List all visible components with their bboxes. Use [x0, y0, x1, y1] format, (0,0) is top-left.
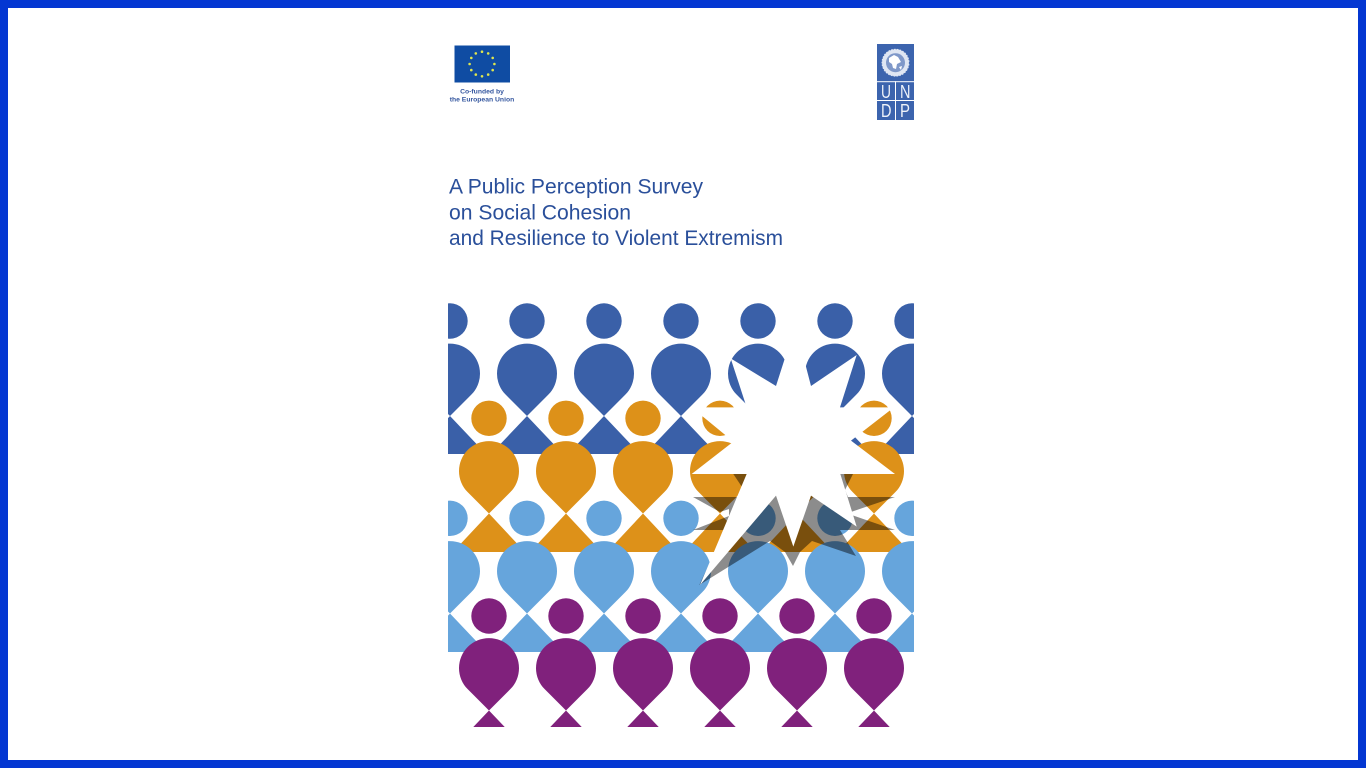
- EU caption: the European Union: [450, 96, 514, 103]
- UNDP letters: D: [881, 100, 892, 121]
- title: A Public Perception Survey: [449, 175, 703, 198]
- illustration: rows of people with starburst: [448, 303, 914, 727]
- title: and Resilience to Violent Extremism: [449, 227, 783, 250]
- people row: dark blue: [448, 303, 914, 454]
- logo: EU co-funded: [450, 46, 514, 103]
- title: on Social Cohesion: [449, 201, 631, 224]
- people row: purple: [459, 598, 904, 727]
- UNDP letters: P: [900, 100, 910, 121]
- white starburst: [692, 355, 895, 585]
- logo: UNDP: [877, 44, 914, 121]
- EU caption: Co-funded by: [460, 88, 504, 95]
- people row: light blue: [448, 500, 914, 652]
- title: [449, 175, 783, 250]
- UN emblem: [882, 49, 910, 77]
- people row: orange: [453, 401, 910, 552]
- EU flag: [454, 46, 510, 82]
- UNDP letters: [881, 81, 910, 121]
- UNDP letters: U: [881, 81, 891, 102]
- UNDP letters: N: [900, 81, 910, 102]
- starburst shadow: [693, 474, 895, 585]
